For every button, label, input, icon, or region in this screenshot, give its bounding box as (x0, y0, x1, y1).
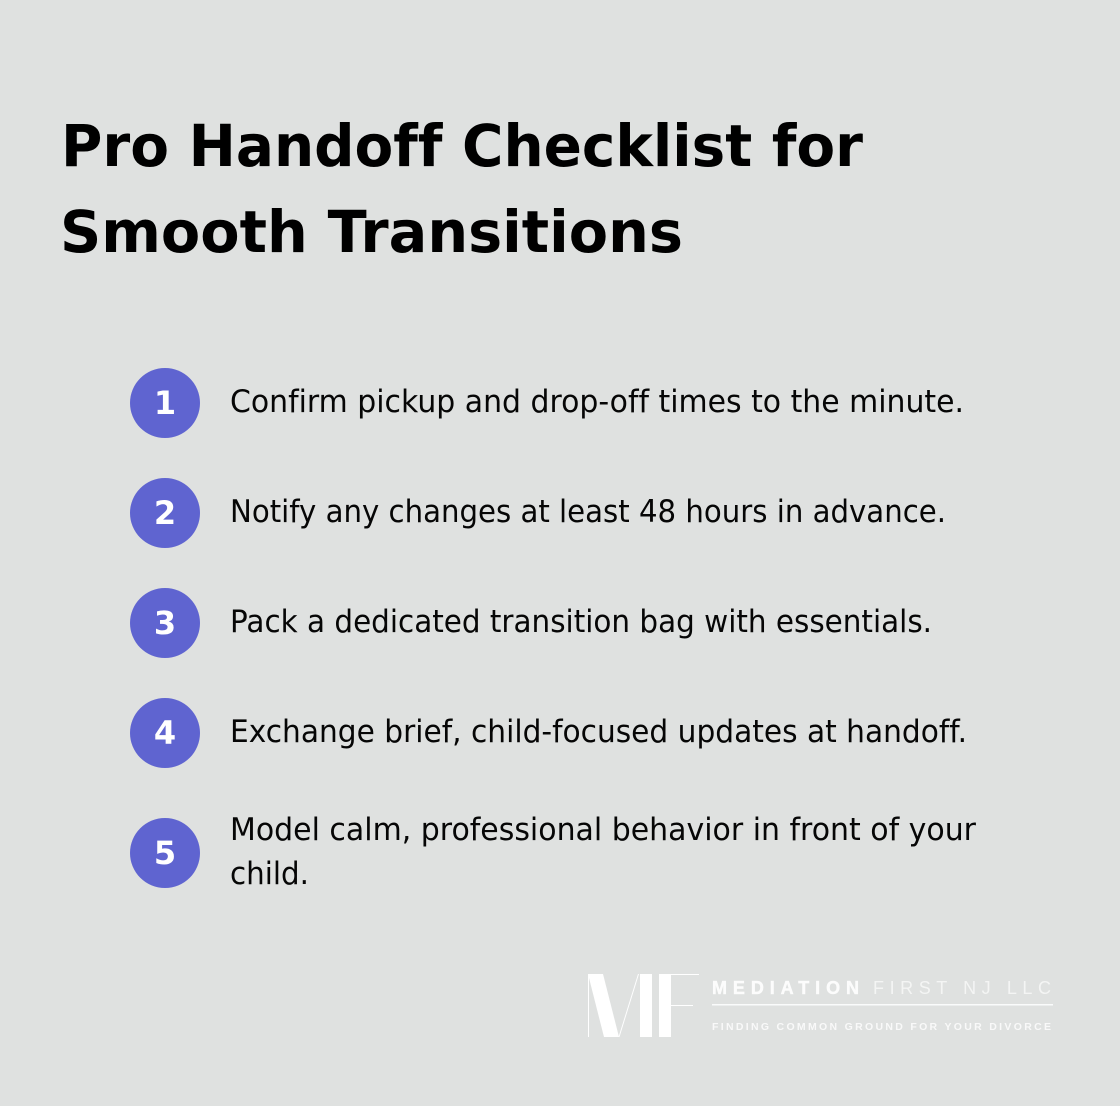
checklist (130, 368, 976, 892)
item 2 (130, 478, 946, 548)
title (60, 112, 863, 266)
item 3: Pack a dedicated transition bag with essentials. (230, 604, 932, 640)
logo name: MEDIATION (712, 978, 859, 998)
item 1 (130, 368, 964, 438)
item 1: Confirm pickup and drop-off times to the minute. (230, 384, 964, 420)
icon: MF monogram (588, 974, 699, 1037)
item 5: 5 (154, 834, 176, 872)
item 2: 2 (154, 494, 176, 532)
item 2: Notify any changes at least 48 hours in advance. (230, 494, 946, 530)
item 4 (130, 698, 967, 768)
item 3 (130, 588, 932, 658)
item 3: 3 (154, 604, 176, 642)
logo tagline: FINDING COMMON GROUND FOR YOUR DIVORCE (712, 1021, 1051, 1033)
item 5: child. (230, 856, 309, 892)
item 5: Model calm, professional behavior in front of your (230, 812, 976, 848)
title: Pro Handoff Checklist for (61, 112, 863, 180)
logo: Mediation First NJ LLC (588, 974, 1053, 1037)
logo: Mediation First NJ LLC: FIRST NJ LLC (873, 978, 1051, 998)
item 4: Exchange brief, child-focused updates at handoff. (230, 714, 967, 750)
item 4: 4 (154, 714, 176, 752)
item 1: 1 (154, 384, 176, 422)
item 5 (130, 812, 976, 892)
title: Smooth Transitions (60, 198, 683, 266)
